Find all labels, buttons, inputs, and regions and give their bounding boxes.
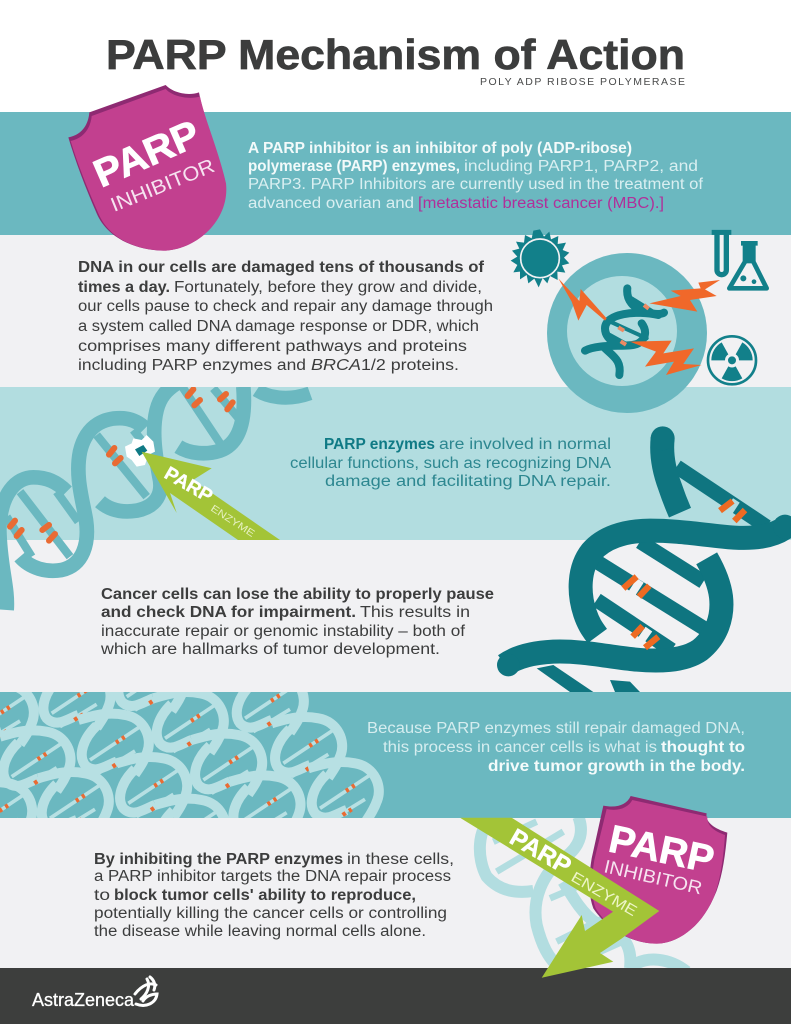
panel: tumor growth (0, 692, 791, 818)
logo mark (135, 977, 157, 1005)
arrow label PARP: PARP (505, 824, 576, 880)
gaps and orange repair marks (623, 501, 745, 648)
badge: PARP inhibitor top (68, 85, 226, 251)
test tube (712, 232, 731, 275)
logo: AstraZeneca (32, 977, 157, 1010)
tumor growth text: thought to (661, 739, 745, 756)
DNA damage text: BRCA (311, 357, 361, 374)
sun (511, 229, 569, 287)
arrow label ENZYME: ENZYME (208, 503, 257, 540)
definition text: PARP3. PARP Inhibitors are currently used in the treatment of (248, 176, 704, 193)
DNA damage text: comprises many different pathways and proteins (78, 338, 467, 355)
DNA damage text: 1/2 proteins. (361, 357, 459, 374)
shield text INHIBITOR: INHIBITOR (602, 855, 704, 898)
DNA damage text: DNA in our cells are damaged tens of thousands of (78, 259, 485, 276)
inhibiting text: the disease while leaving normal cells alone. (94, 923, 426, 940)
rungs (597, 467, 767, 650)
inhibiting text: block tumor cells' ability to reproduce, (114, 887, 416, 904)
inhibiting text: to (94, 887, 110, 904)
DNA damage text: a system called DNA damage response or DDR, which (78, 318, 479, 335)
arrow label ENZYME: ENZYME (568, 869, 640, 920)
cancer cells text: inaccurate repair or genomic instability – both of (101, 623, 466, 640)
shield text PARP: PARP (87, 113, 206, 196)
illustration: pale DNA bottom (480, 817, 687, 972)
cancer cells text: and check DNA for impairment. (101, 604, 356, 621)
definition text: A PARP inhibitor is an inhibitor of poly (ADP-ribose) (248, 140, 632, 157)
panel: inhibiting (0, 818, 791, 968)
cancer cells text: Cancer cells can lose the ability to properly pause (101, 586, 494, 603)
tumor growth text: Because PARP enzymes still repair damaged DNA, (367, 720, 745, 737)
arrow label PARP: PARP (160, 463, 216, 507)
tumor growth text: drive tumor growth in the body. (488, 758, 745, 775)
subtitle: POLY ADP RIBOSE POLYMERASE (480, 76, 685, 88)
strands (505, 438, 787, 665)
DNA damage text: Fortunately, before they grow and divide, (174, 279, 482, 296)
DNA damage text: including PARP enzymes and (78, 357, 306, 374)
DNA damage text: our cells pause to check and repair any damage through (78, 298, 493, 315)
flask (729, 243, 767, 288)
inhibiting text: potentially killing the cancer cells or controlling (94, 905, 447, 922)
inhibiting text: a PARP inhibitor targets the DNA repair process (94, 868, 451, 885)
inhibiting text (94, 851, 454, 940)
PARP enzymes text: are involved in normal (439, 436, 611, 453)
definition text (248, 140, 704, 212)
badge: PARP inhibitor bottom (589, 796, 727, 944)
PARP enzymes text: cellular functions, such as recognizing DNA (290, 455, 612, 472)
shield (589, 796, 727, 944)
PARP enzymes text: PARP enzymes (324, 436, 435, 453)
PARP enzymes text (290, 436, 612, 490)
arrow: PARP enzyme top (142, 452, 280, 540)
DNA damage text (78, 259, 493, 374)
cell circle (547, 253, 707, 413)
shield text PARP: PARP (605, 818, 718, 882)
definition text: advanced ovarian and (248, 195, 414, 212)
inhibiting text: in these cells, (347, 851, 454, 868)
tumor growth text: this process in cancer cells is what is (383, 739, 657, 756)
illustration: DNA helix left (0, 383, 310, 610)
definition text: [metastatic breast cancer (MBC).] (418, 195, 664, 212)
footer bar (0, 968, 791, 1024)
definition text: including PARP1, PARP2, and (464, 158, 698, 175)
shield text INHIBITOR: INHIBITOR (108, 155, 218, 217)
cancer cells text: which are hallmarks of tumor development. (100, 641, 440, 658)
radiation symbol (708, 336, 756, 384)
tumor growth text (367, 720, 745, 775)
panel: cancer cells (0, 540, 791, 692)
DNA damage text: times a day. (78, 279, 170, 296)
logo: AstraZeneca: AstraZeneca (32, 989, 135, 1010)
cancer cells text (100, 586, 494, 658)
cancer cells text: This results in (360, 604, 470, 621)
shield (68, 85, 226, 251)
panel: PARP enzymes (0, 387, 791, 540)
arrow: PARP enzyme bottom (460, 818, 659, 978)
illustration: DNA damage sources (511, 229, 767, 413)
title: PARP Mechanism of Action (106, 31, 685, 78)
illustration: large DNA helix (497, 426, 791, 692)
damage site (125, 435, 155, 467)
panel: definition (0, 112, 791, 235)
inhibiting text: By inhibiting the PARP enzymes (94, 851, 343, 868)
definition text: polymerase (PARP) enzymes, (248, 158, 460, 175)
DNA pattern (0, 692, 384, 818)
small DNA (585, 288, 664, 375)
panel: DNA damage (0, 235, 791, 387)
lightning bolts (558, 278, 720, 375)
PARP enzymes text: damage and facilitating DNA repair. (325, 473, 611, 490)
